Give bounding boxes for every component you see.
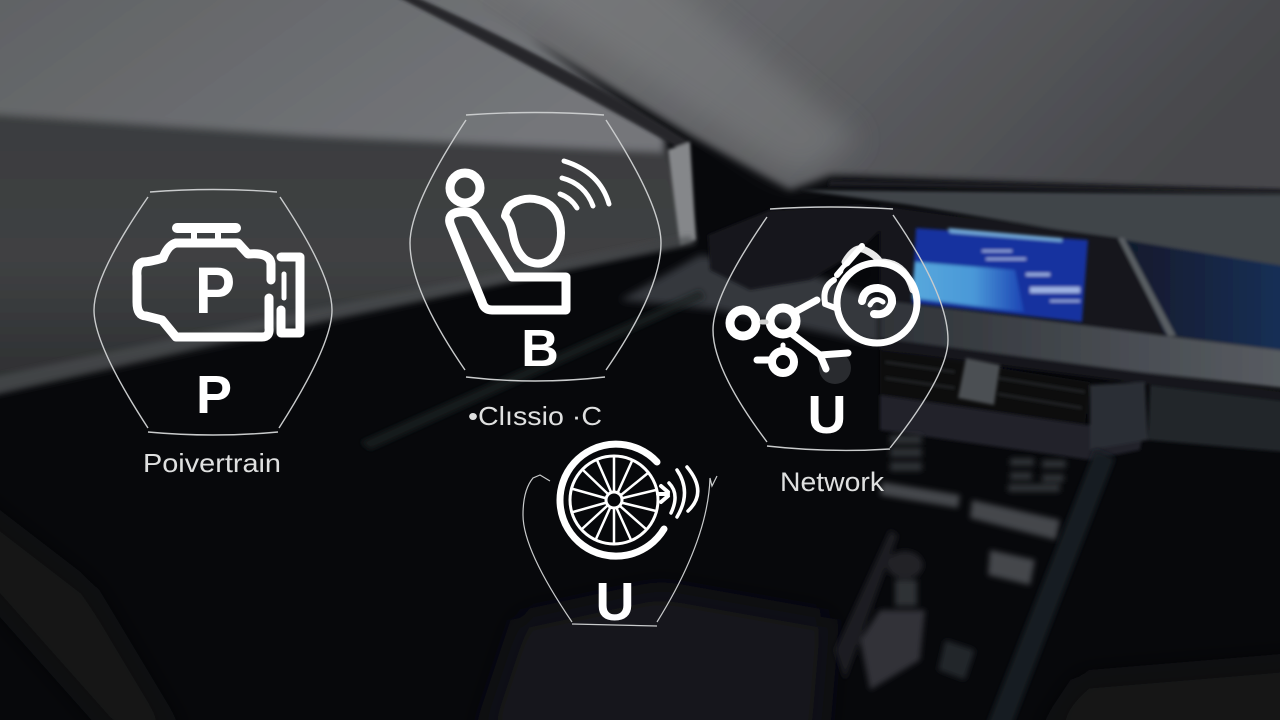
icon: engine: [137, 228, 300, 337]
dashboard vents and vent slats: [885, 362, 1085, 408]
label: powertrain: Poivertrain: [143, 448, 281, 478]
category letter P: P: [196, 365, 232, 425]
infotainment screen: [912, 228, 1088, 322]
gear lever and console: [835, 450, 1115, 720]
icon: seat and airbag: [450, 161, 609, 310]
panel: network: [713, 207, 948, 497]
category letter U wheel: U: [596, 572, 634, 632]
engine letter P: P: [195, 253, 235, 327]
label: network: Network: [780, 467, 885, 497]
panel: powertrain: [94, 190, 332, 478]
hexagon frame: wheel: [523, 475, 717, 626]
category letter U network: U: [808, 385, 846, 445]
icon: network nodes and cloud: [730, 246, 917, 384]
panel: body: [410, 112, 661, 431]
centre stack buttons: [880, 435, 1066, 585]
label: chassis: •Clıssio ·C: [468, 401, 602, 431]
icon: wheel with signal: [560, 444, 698, 556]
hexagon frame: body: [410, 112, 661, 381]
hexagon frame: network: [713, 207, 948, 450]
hexagon frame: powertrain: [94, 190, 332, 435]
panel: chassis wheel: [523, 444, 717, 632]
category letter B: B: [521, 320, 559, 378]
